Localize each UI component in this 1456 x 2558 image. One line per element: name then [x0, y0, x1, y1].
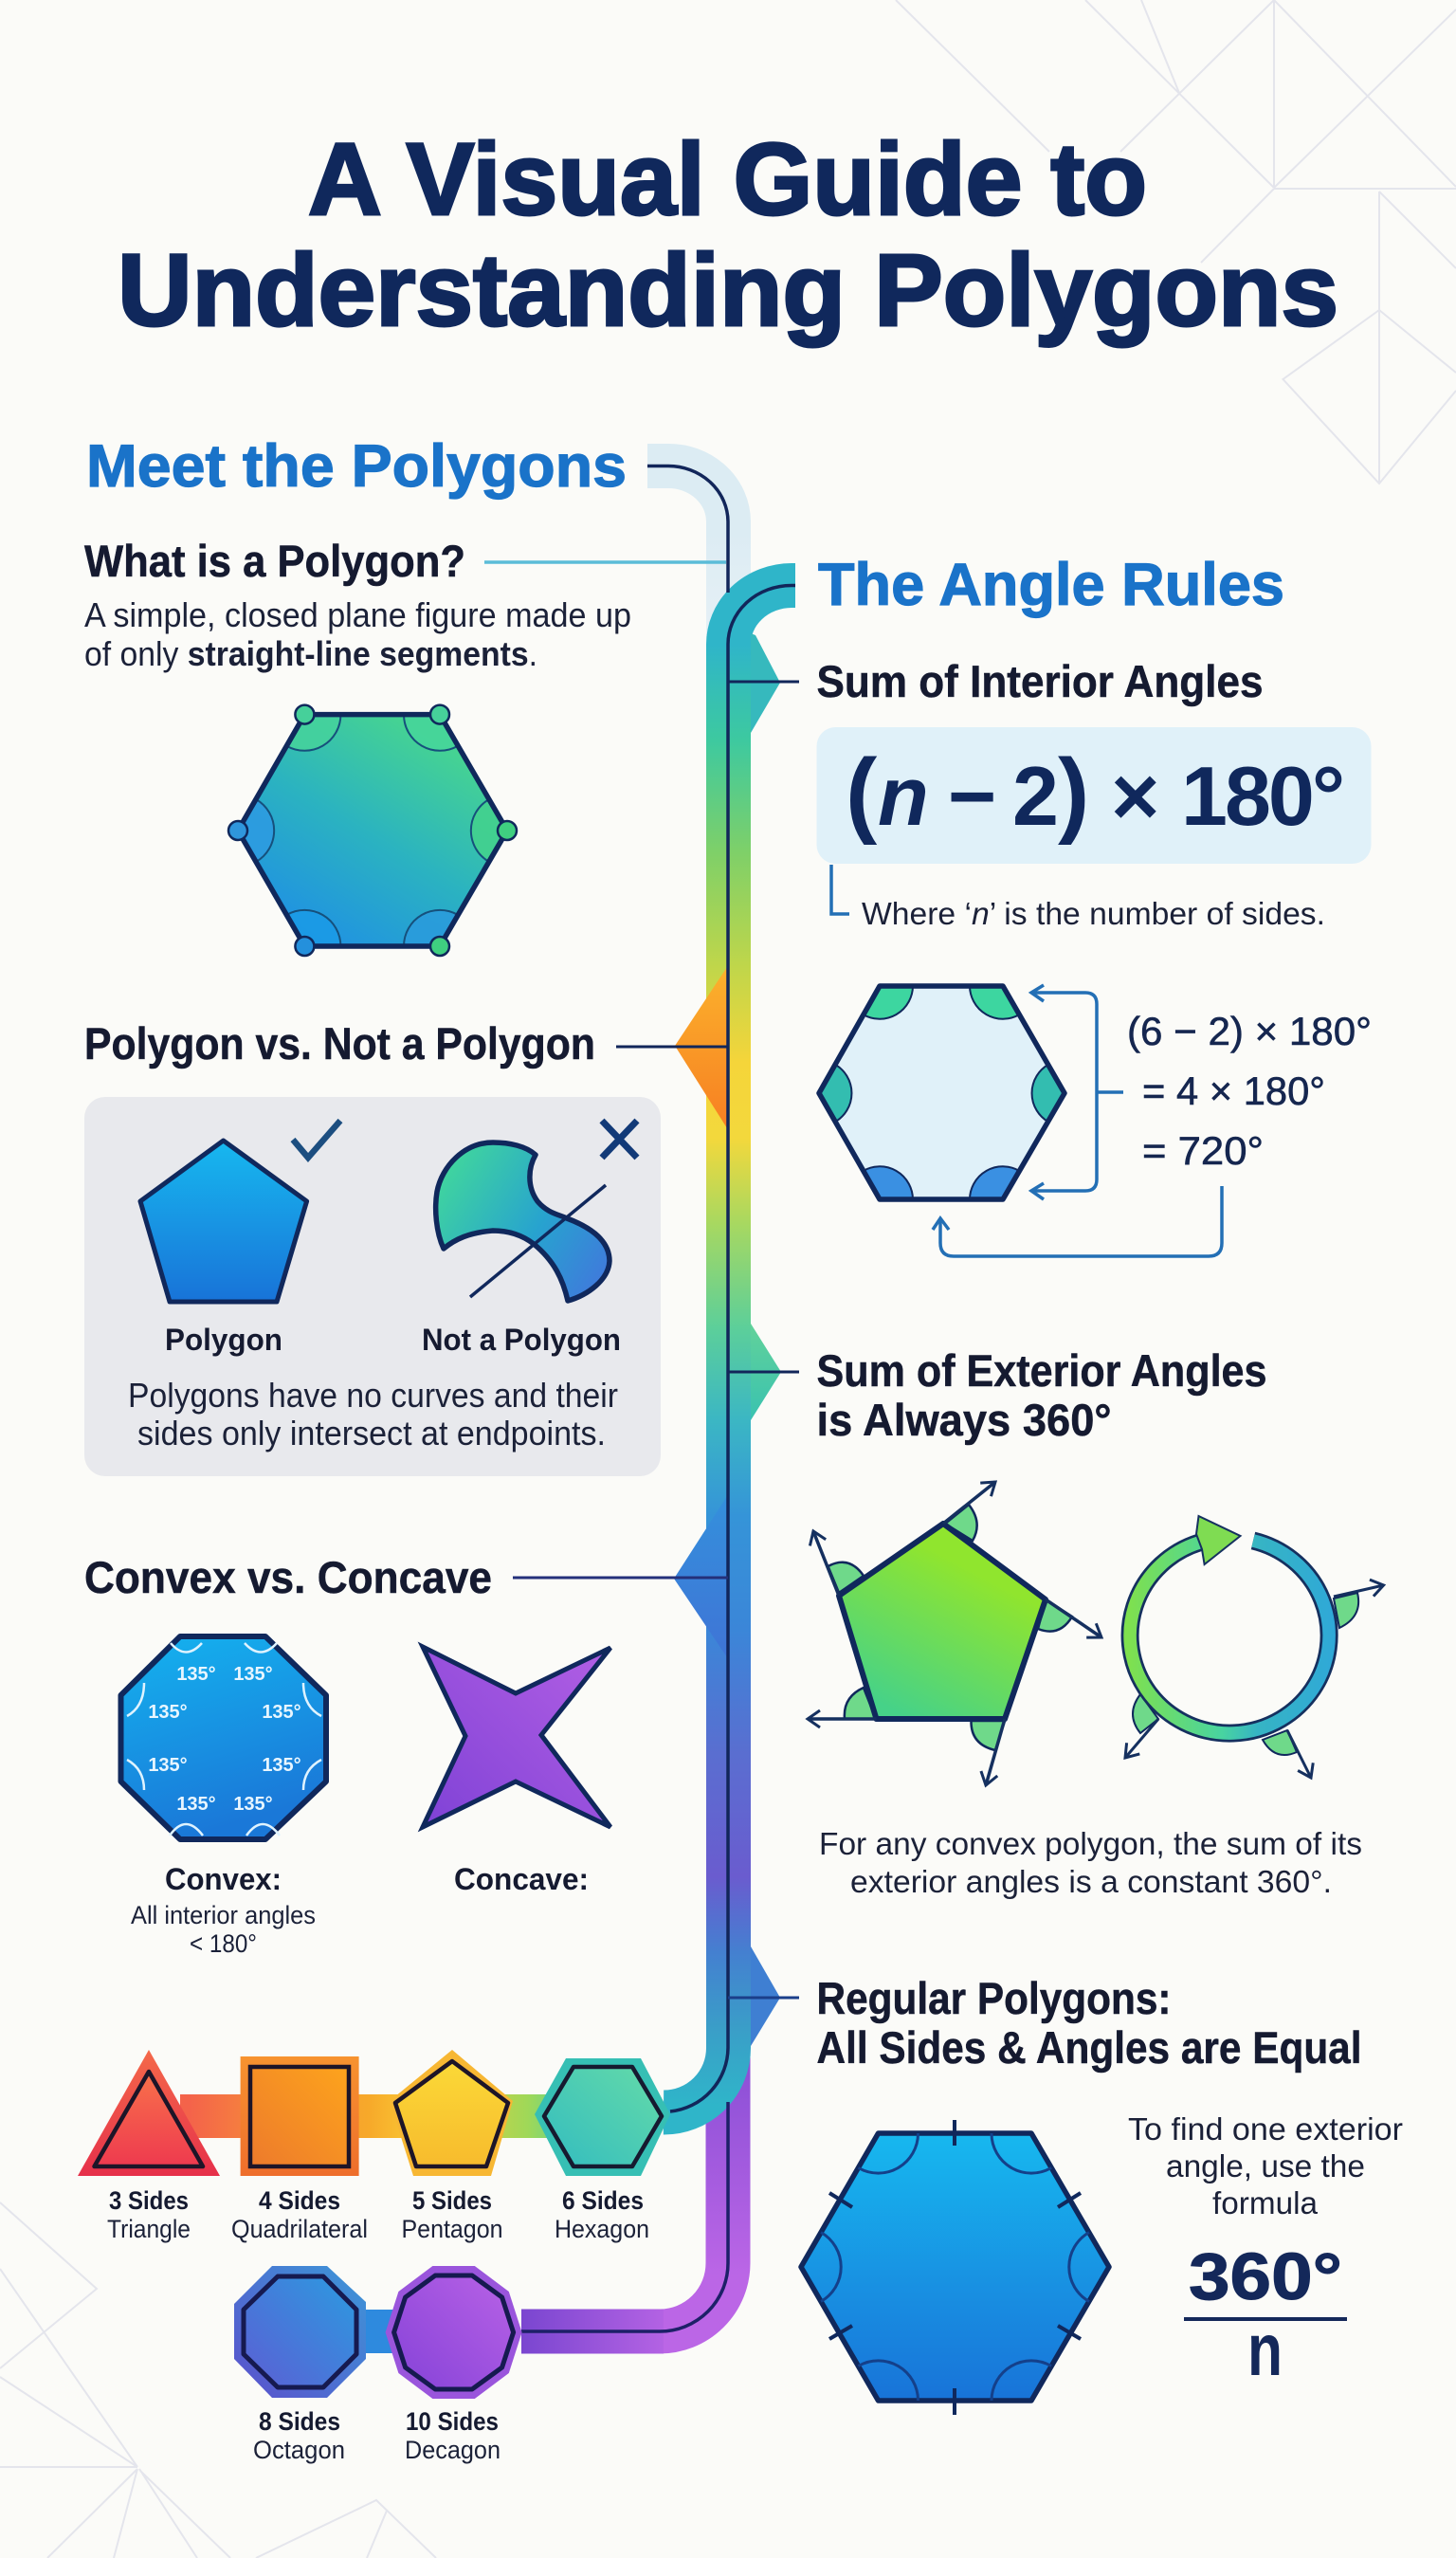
label: Convex: < 180°	[190, 1929, 257, 1958]
diagram: circular exterior angle arrow	[1125, 1516, 1384, 1778]
title	[118, 121, 1338, 347]
label: Polygon: Polygon	[165, 1323, 282, 1357]
title: A Visual Guide to	[308, 121, 1147, 236]
polygon: triangle	[78, 2050, 220, 2243]
heading: Regular Polygons: All Sides & Angles are Equal	[817, 2022, 1361, 2073]
formula box: n	[878, 749, 929, 843]
text: polygon definition: A simple, closed plane figure made up	[84, 595, 631, 634]
polygon: quadrilateral	[231, 2056, 368, 2243]
formula box: ×	[1111, 749, 1159, 843]
polygon: decagon: 10 Sides	[406, 2407, 499, 2436]
panel: polygon vs not a polygon	[84, 1097, 661, 1476]
polygon: quadrilateral: 4 Sides	[259, 2186, 340, 2215]
text: exterior angle formula: formula	[1212, 2185, 1319, 2220]
diagram: regular hexagon	[801, 2120, 1109, 2415]
timeline spine	[484, 466, 799, 2331]
note: where n is the number of sides: Where ‘n’ is the number of sides.	[862, 896, 1325, 931]
worked calculation: = 4 × 180°	[1142, 1069, 1325, 1113]
diagram: hexagon interior angles	[819, 986, 1065, 1199]
heading: Regular Polygons: Regular Polygons:	[817, 1973, 1172, 2023]
polygon: decagon: Decagon	[405, 2436, 500, 2464]
title: Understanding Polygons	[118, 232, 1338, 347]
polygon: hexagon	[535, 2058, 670, 2243]
worked calculation	[1127, 1009, 1372, 1173]
polygon: hexagon: 6 Sides	[562, 2186, 644, 2215]
icon: convex octagon: 135°	[176, 1664, 216, 1685]
worked calculation: (6 − 2) × 180°	[1127, 1009, 1372, 1053]
heading: Regular Polygons	[817, 1973, 1361, 2073]
caption: sides only intersect at endpoints.	[137, 1414, 606, 1453]
icon: convex octagon: 135°	[262, 1702, 301, 1723]
text: exterior angle formula: angle, use the	[1166, 2148, 1365, 2183]
label: Concave: Concave:	[454, 1862, 589, 1896]
text: exterior angle explanation: exterior angles is a constant 360°.	[850, 1864, 1332, 1899]
caption: Polygons have no curves and their	[128, 1376, 618, 1415]
icon: labelled hexagon	[228, 705, 517, 956]
label: Convex: Convex:	[165, 1862, 282, 1896]
text: exterior angle formula: To find one exterior	[1128, 2111, 1403, 2147]
icon: cross mark	[602, 1121, 637, 1158]
note: where n is the number of sides	[831, 865, 1325, 931]
polygon: triangle: 3 Sides	[109, 2186, 189, 2215]
icon: convex octagon: 135°	[176, 1794, 216, 1815]
polygon: octagon: Octagon	[253, 2436, 345, 2464]
polygon: pentagon: 5 Sides	[412, 2186, 492, 2215]
formula box: )	[1058, 740, 1089, 846]
icon: convex octagon	[121, 1636, 326, 1839]
icon: concave star	[423, 1647, 610, 1827]
polygon: triangle: Triangle	[107, 2215, 191, 2243]
label: Convex	[131, 1862, 316, 1958]
heading: Meet the Polygons: Meet the Polygons	[86, 433, 627, 500]
label: Convex: All interior angles	[131, 1901, 316, 1929]
heading: Convex vs. Concave: Convex vs. Concave	[84, 1552, 492, 1602]
heading: Polygon vs. Not a Polygon: Polygon vs. Not a Polygon	[84, 1018, 595, 1069]
caption	[128, 1376, 618, 1453]
polygon: quadrilateral: Quadrilateral	[231, 2215, 368, 2243]
icon: convex octagon: 135°	[233, 1794, 273, 1815]
heading: Sum of Interior Angles: Sum of Interior Angles	[817, 656, 1263, 706]
heading: What is a Polygon?: What is a Polygon?	[84, 536, 465, 586]
icon: convex octagon: 135°	[148, 1755, 188, 1776]
text: polygon definition	[84, 595, 631, 673]
text: exterior angle formula: n	[1247, 2308, 1283, 2391]
heading: The Angle Rules: The Angle Rules	[818, 552, 1284, 618]
label: Not a Polygon: Not a Polygon	[422, 1323, 621, 1357]
icon: convex octagon: 135°	[148, 1702, 188, 1723]
icon: check mark	[293, 1121, 340, 1158]
text: exterior angle formula: 360°	[1189, 2239, 1342, 2313]
text: exterior angle formula	[1128, 2111, 1403, 2391]
diagram: pentagon exterior angles	[808, 1482, 1101, 1785]
heading: Sum of Exterior Angles	[817, 1345, 1266, 1445]
formula box	[817, 727, 1371, 864]
icon: convex octagon: 135°	[233, 1664, 273, 1685]
worked calculation: = 720°	[1142, 1128, 1264, 1173]
formula box: 2	[1012, 749, 1059, 843]
formula box: −	[948, 749, 996, 843]
text: exterior angle explanation	[819, 1826, 1362, 1899]
polygon: octagon	[234, 2266, 366, 2464]
arrows: angle bracket	[933, 985, 1222, 1256]
icon: convex octagon: 135°	[262, 1755, 301, 1776]
polygon: octagon: 8 Sides	[259, 2407, 340, 2436]
polygon: decagon	[386, 2266, 522, 2464]
formula box: 180°	[1181, 749, 1342, 843]
text: polygon definition: of only straight-line segments.	[84, 634, 537, 673]
polygon row connector	[180, 2094, 578, 2353]
heading: Sum of Exterior Angles: is Always 360°	[817, 1395, 1111, 1445]
polygon: pentagon: Pentagon	[402, 2215, 502, 2243]
formula box: (	[846, 740, 878, 846]
heading: Sum of Exterior Angles: Sum of Exterior Angles	[817, 1345, 1266, 1396]
polygon: hexagon: Hexagon	[555, 2215, 649, 2243]
text: exterior angle explanation: For any convex polygon, the sum of its	[819, 1826, 1362, 1861]
icon: blue pentagon	[140, 1141, 307, 1302]
icon: curved non-polygon	[436, 1142, 610, 1301]
polygon: pentagon	[390, 2050, 513, 2243]
